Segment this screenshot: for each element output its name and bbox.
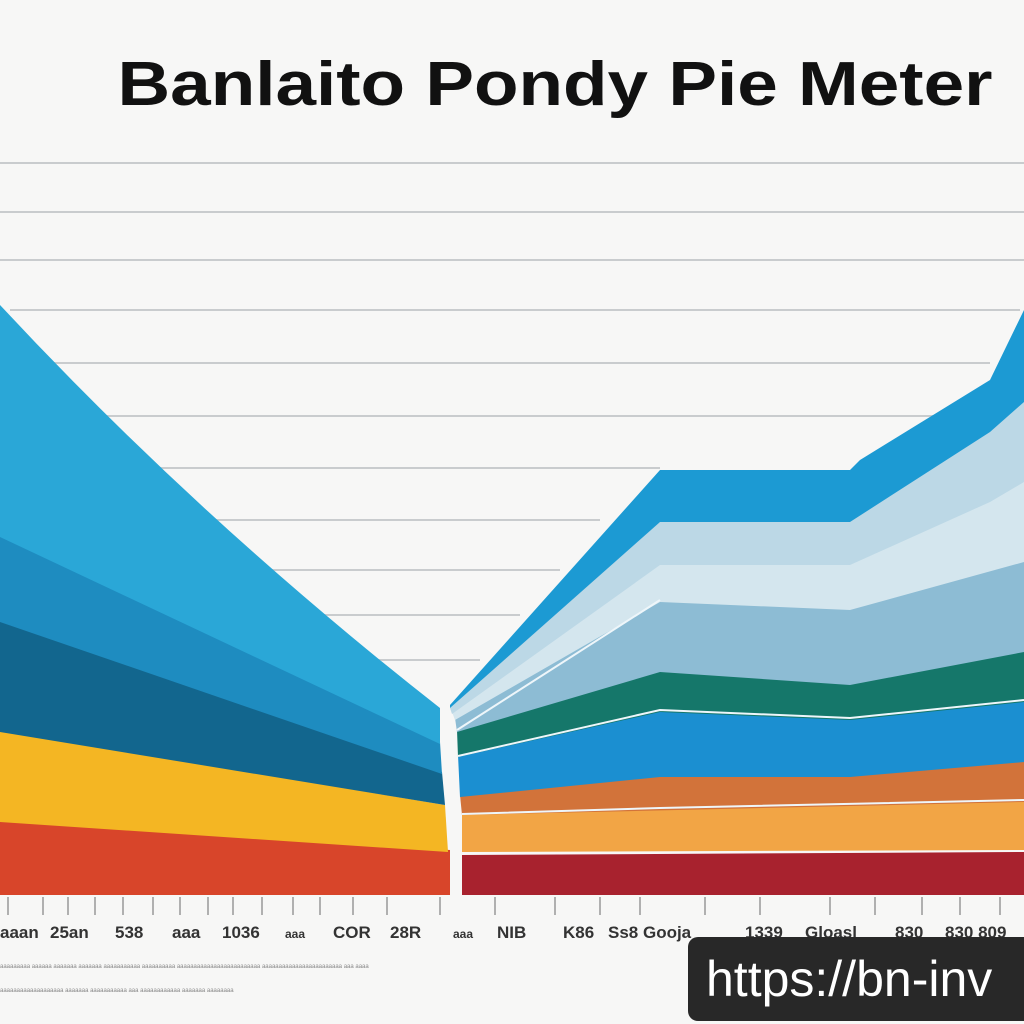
axis labels: 25an (50, 923, 89, 942)
axis labels: 1339 (745, 923, 783, 942)
axis labels: aaa (285, 927, 305, 941)
axis labels: 1036 (222, 923, 260, 942)
axis labels: K86 (563, 923, 594, 942)
axis labels: 830 (895, 923, 923, 942)
axis labels: COR (333, 923, 371, 942)
footnote text: aaaaaaaaaaaaaaaaaaa aaaaaaa aaaaaaaaaaa aaa aaaaaaaaaaaa aaaaaaa aaaaaaaa (0, 988, 234, 994)
chart: left area layers (0, 305, 450, 895)
chart: right area layers (450, 310, 1024, 895)
url badge (688, 937, 1024, 1021)
footnote text (0, 964, 369, 994)
axis labels (0, 923, 1006, 942)
axis labels: Ss8 Gooja (608, 923, 692, 942)
axis labels: aaan (0, 923, 39, 942)
footnote text: aaaaaaaaa aaaaaa aaaaaaa aaaaaaa aaaaaaaaaaa aaaaaaaaaa aaaaaaaaaaaaaaaaaaaaaaaaa aaaaaaaaaaaaaaaaaaaaaaaa aaa aaaa (0, 964, 369, 970)
axis ticks (8, 897, 1000, 915)
url badge: https://bn-inv (706, 951, 992, 1007)
axis labels: NIB (497, 923, 526, 942)
axis labels: 28R (390, 923, 421, 942)
axis labels: 538 (115, 923, 143, 942)
title: Banlaito Pondy Pie Meter (118, 50, 992, 119)
axis labels: aaa (172, 923, 201, 942)
axis labels: aaa (453, 927, 473, 941)
axis labels: 830 809 (945, 923, 1006, 942)
axis labels: Gloasl (805, 923, 857, 942)
